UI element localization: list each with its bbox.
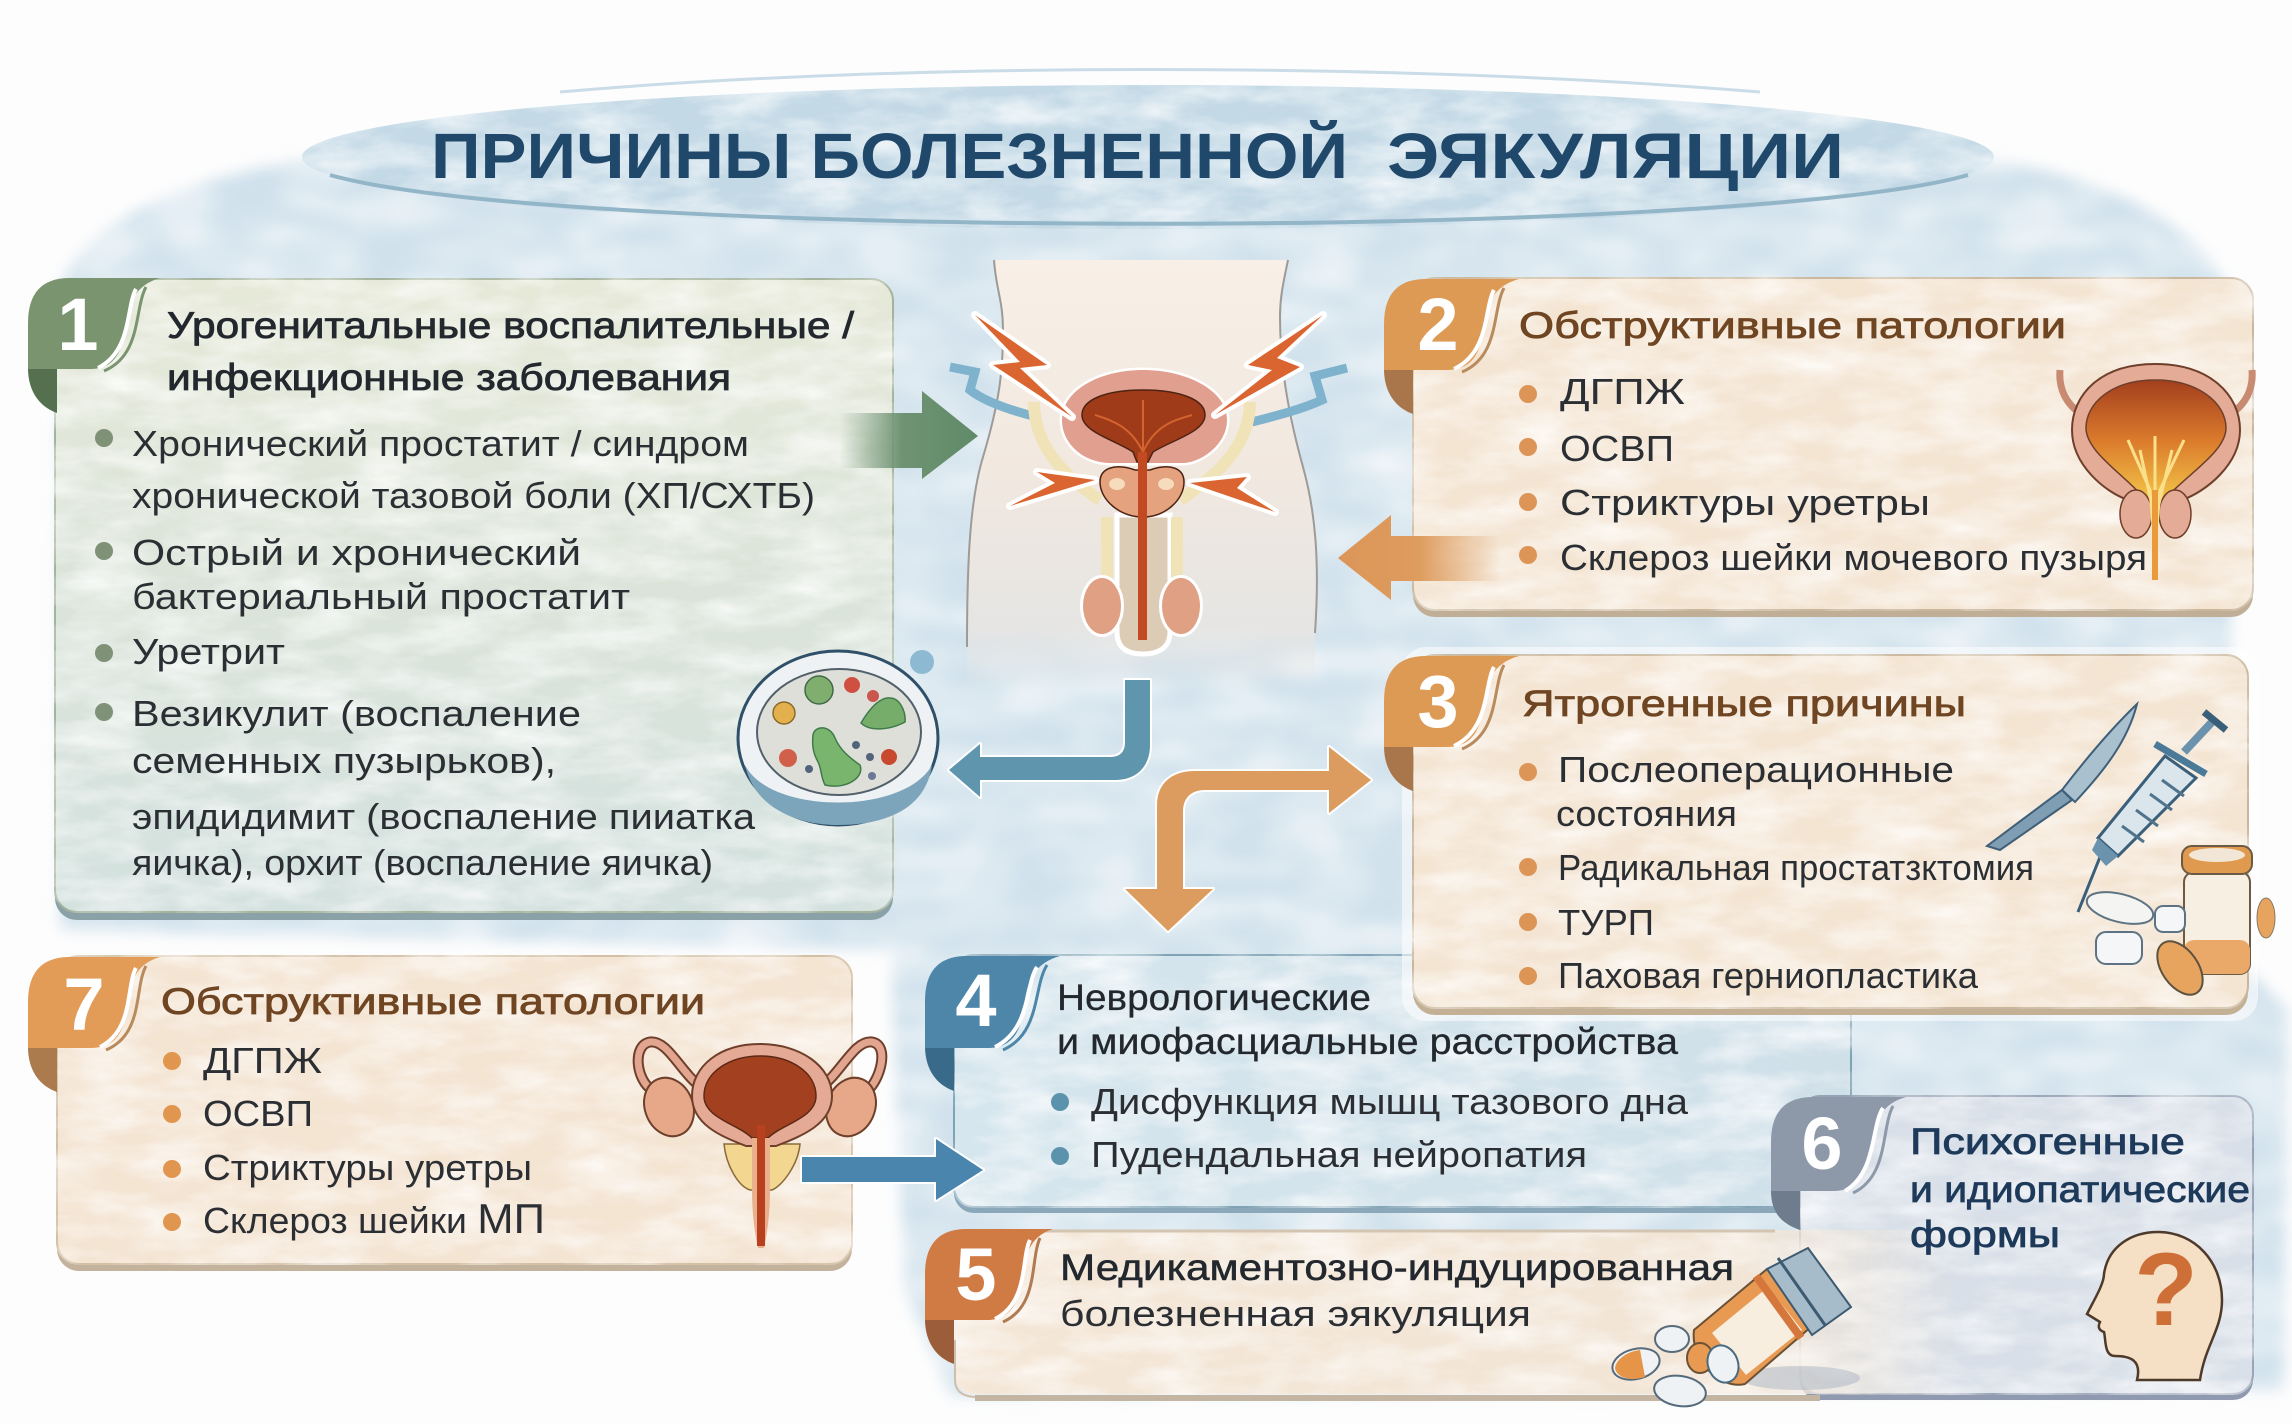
panel 4 heading line 2: и миофасциальные расстройства: [1057, 1021, 1678, 1062]
urethra: [1138, 452, 1147, 640]
bolt lower left: [1010, 472, 1095, 506]
bolt upper right: [1215, 315, 1323, 415]
item: Паховая герниопластика: [1558, 955, 1979, 996]
panel 4 shadow: [954, 960, 1851, 1213]
bullet: [1519, 385, 1537, 403]
panel 5 body: [954, 1230, 1954, 1394]
icon: spilled pill bottle: [1609, 1248, 1860, 1409]
body silhouette: [967, 260, 1317, 690]
panel 5: drug induced: [925, 1229, 1954, 1409]
panel 7: obstructive: [28, 956, 884, 1271]
item: Острый и хронический: [132, 532, 581, 573]
icon: scalpel: [1987, 704, 2137, 850]
bullet: [1519, 763, 1537, 781]
bullet: [95, 644, 113, 662]
bullet: [95, 542, 113, 560]
panel 1 heading: Урогенитальные воспалительные /: [167, 305, 855, 346]
item continuation: хронической тазовой боли (ХП/СХТБ): [132, 475, 815, 516]
item: Дисфункция мышц тазового дна: [1091, 1081, 1689, 1122]
panel 6 body: psychogenic: [1800, 1096, 2253, 1400]
central anatomy illustration: [950, 260, 1347, 690]
dish interior: [757, 669, 921, 795]
item: Склероз шейки МП: [203, 1195, 545, 1242]
body outline left: [967, 260, 1003, 647]
bladder wall: [1062, 370, 1227, 463]
panel 5 ribbon: 5: [955, 1233, 997, 1316]
icon: syringe: [2078, 712, 2226, 912]
icon: head with question mark: [2087, 1232, 2222, 1380]
vas cords: [1107, 517, 1177, 580]
panel 7 shadow: [57, 962, 852, 1271]
panel 2 heading: Обструктивные патологии: [1519, 305, 2066, 346]
item: Хронический простатит / синдром: [132, 423, 749, 464]
item: ТУРП: [1558, 902, 1654, 943]
bullet: [1519, 967, 1537, 985]
bubble: [910, 650, 934, 674]
panel 5 ribbon: [925, 1229, 1053, 1364]
title part 2: ЭЯКУЛЯЦИИ: [1387, 120, 1844, 192]
item: Радикальная простатзктомия: [1558, 847, 2034, 888]
body outline right: [1280, 260, 1317, 633]
microbes: [773, 676, 905, 786]
item: ДГПЖ: [203, 1040, 322, 1081]
item: ДГПЖ: [1560, 371, 1685, 412]
panel 5 heading line 2: болезненная эякуляция: [1060, 1293, 1531, 1334]
panel 2 ribbon: [1384, 279, 1519, 414]
blue pain wisp right: [1252, 368, 1347, 422]
panel 1 body: [55, 279, 893, 912]
bullet: [1519, 913, 1537, 931]
panel 7 heading: Обструктивные патологии: [161, 981, 705, 1022]
panel 1 ribbon: [28, 278, 160, 413]
prostate: [1100, 467, 1184, 517]
icon: uterus-like pelvic organ: [636, 1042, 884, 1248]
panel 4 body: [954, 955, 1851, 1207]
bullet: [163, 1213, 181, 1231]
title highlight arc: [560, 70, 1760, 92]
bullet: [1519, 493, 1537, 511]
panel 6 heading line 3: формы: [1910, 1214, 2060, 1255]
dish base shading: [745, 765, 932, 825]
icon: head with question mark: ?: [2134, 1232, 2198, 1348]
item: Уретрит: [132, 631, 285, 672]
item continuation: яичка), орхит (воспаление яичка): [132, 842, 713, 883]
panel 2 shadow: [1413, 284, 2253, 617]
panel 6 header: psychogenic: [1771, 1097, 2250, 1380]
item: ОСВП: [1560, 428, 1674, 469]
item: Стриктуры уретры: [203, 1147, 532, 1188]
panel 4 ribbon: 4: [955, 959, 997, 1042]
panel 6 ribbon: [1771, 1097, 1906, 1230]
panel 2 ribbon: 2: [1417, 283, 1459, 366]
shaft: [1117, 515, 1170, 654]
title banner: [302, 70, 1994, 229]
title words: [431, 119, 1844, 192]
panel 2: obstructive: [1384, 278, 2253, 617]
panel 5 heading: Медикаментозно-индуцированная: [1060, 1247, 1734, 1288]
bullet: [95, 429, 113, 447]
panel 1 ribbon: 1: [57, 283, 99, 366]
panel 1: inflammatory: [28, 278, 893, 920]
arrow: double orange arrow: [1125, 747, 1371, 931]
panel 6 heading line 2: и идиопатические: [1910, 1169, 2250, 1210]
panel 6 shadow: [1800, 1102, 2253, 1400]
item continuation: эпидидимит (воспаление пииатка: [132, 796, 756, 837]
panel 6 body fill: [1800, 1096, 2253, 1394]
panel 3 body: [1413, 655, 2248, 1008]
item: ОСВП: [203, 1093, 313, 1134]
spermatic cords: [1034, 402, 1250, 500]
dish rim: [738, 651, 938, 825]
bladder cavity: [1082, 390, 1205, 462]
panel 4: neurological: [925, 955, 1851, 1213]
item continuation: семенных пузырьков),: [132, 740, 556, 781]
bullet: [163, 1105, 181, 1123]
item: Везикулит (воспаление: [132, 693, 581, 734]
item continuation: состояния: [1556, 793, 1737, 834]
bullet: [1051, 1147, 1069, 1165]
bullet: [1519, 438, 1537, 456]
panel 5 base line: [975, 1395, 1820, 1401]
panel 7 body: [57, 956, 852, 1264]
panel 5 left line: [955, 1340, 975, 1397]
blue pain wisp left: [950, 367, 1033, 416]
panel 3 ribbon: [1384, 656, 1519, 791]
item: Послеоперационные: [1558, 749, 1954, 790]
panel 3: iatrogenic: [1384, 647, 2275, 1021]
arrow: panel 1 to anatomy: [840, 391, 978, 479]
icon: petri dish: [738, 650, 938, 825]
bullet: [163, 1160, 181, 1178]
title part 1: ПРИЧИНЫ БОЛЕЗНЕННОЙ: [431, 119, 1348, 192]
arrow: anatomy to petri dish: [949, 680, 1150, 797]
icon: bladder: [2060, 364, 2252, 580]
panel 4 ribbon: [925, 956, 1060, 1091]
item: Пудендальная нейропатия: [1091, 1134, 1587, 1175]
title ellipse: [302, 85, 1994, 229]
bolt upper left: [975, 315, 1072, 417]
title ellipse rim: [330, 175, 1968, 224]
bullet: [1519, 858, 1537, 876]
panel 3 shadow: [1413, 661, 2248, 1015]
panel 6 heading: Психогенные: [1910, 1121, 2185, 1162]
bullet: [95, 703, 113, 721]
panel 7 ribbon: 7: [63, 963, 105, 1046]
testis right: [1162, 578, 1200, 634]
panel 2 body: [1413, 278, 2253, 610]
bullet: [1519, 546, 1537, 564]
panel 1 shadow: [55, 285, 893, 920]
panel 3 halo: [1402, 647, 2258, 1021]
panel 5 top line: [975, 1230, 1775, 1232]
bolt lower right: [1190, 477, 1275, 512]
testis left: [1083, 578, 1121, 634]
arrow: panel 2 to anatomy: [1338, 515, 1500, 600]
panel 3 heading: Ятрогенные причины: [1522, 683, 1966, 724]
item continuation: бактериальный простатит: [132, 576, 630, 617]
panel 6 ribbon: 6: [1801, 1102, 1843, 1185]
bullet: [1051, 1093, 1069, 1111]
prostate highlights: [1109, 478, 1174, 490]
item: Склероз шейки мочевого пузыря: [1560, 537, 2147, 578]
bladder veins: [1095, 400, 1192, 452]
panel 3 ribbon: 3: [1417, 660, 1459, 743]
arrow: panel 7 to panel 4: [802, 1139, 983, 1200]
panel 1 heading line 2: инфекционные заболевания: [167, 357, 731, 398]
panel 4 heading: Неврологические: [1057, 977, 1371, 1018]
icon: pills and jar: [2084, 846, 2275, 1003]
bullet: [163, 1052, 181, 1070]
panel 7 ribbon: [28, 957, 160, 1092]
item: Стриктуры уретры: [1560, 482, 1930, 523]
